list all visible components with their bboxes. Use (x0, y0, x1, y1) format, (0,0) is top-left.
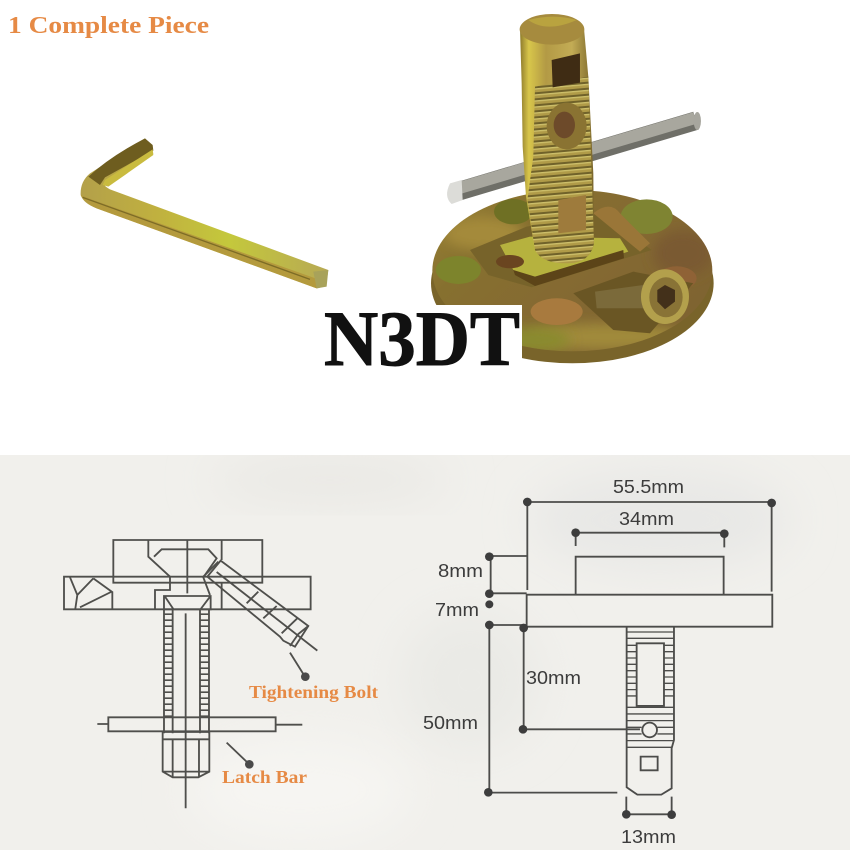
panel: top product photo area (0, 0, 850, 455)
plate (431, 190, 714, 363)
lower shaft (163, 732, 209, 777)
dimension labels: 34mm (619, 509, 674, 529)
tightening bolt (595, 269, 689, 324)
icon: lock bolt assembly photo (431, 14, 714, 363)
leader lines (227, 653, 305, 764)
dimension labels: 55.5mm (613, 477, 684, 497)
logo: N3DT (324, 295, 520, 382)
panel: technical drawings background (0, 455, 850, 850)
threaded shaft (520, 14, 594, 263)
center line (186, 540, 187, 808)
latch bar rod (447, 112, 701, 204)
label: tightening bolt: Tightening Bolt (249, 682, 378, 702)
icon: hex key photo (81, 138, 328, 288)
angled bolt (207, 561, 308, 647)
width dimensions (527, 502, 772, 592)
dimension labels: 30mm (526, 668, 581, 688)
dimension labels: 7mm (435, 600, 479, 620)
screw head (164, 596, 211, 610)
head and plate (576, 557, 724, 595)
label: latch bar: Latch Bar (222, 767, 307, 787)
top block (113, 540, 262, 583)
dimension labels: 8mm (438, 561, 483, 581)
diagram: dimensioned drawing (484, 498, 776, 819)
left heights (489, 556, 640, 793)
shaft (627, 627, 674, 795)
diagram: sectional drawing (64, 540, 317, 808)
dimension labels (423, 477, 684, 847)
latch bar (97, 717, 302, 731)
base plate (64, 577, 311, 609)
width of shaft (626, 797, 672, 814)
dimension labels: 50mm (423, 713, 478, 733)
threaded body (164, 610, 209, 733)
dimension dots (484, 498, 776, 819)
dimension labels: 13mm (621, 827, 676, 847)
title: 1 Complete Piece (8, 13, 209, 39)
